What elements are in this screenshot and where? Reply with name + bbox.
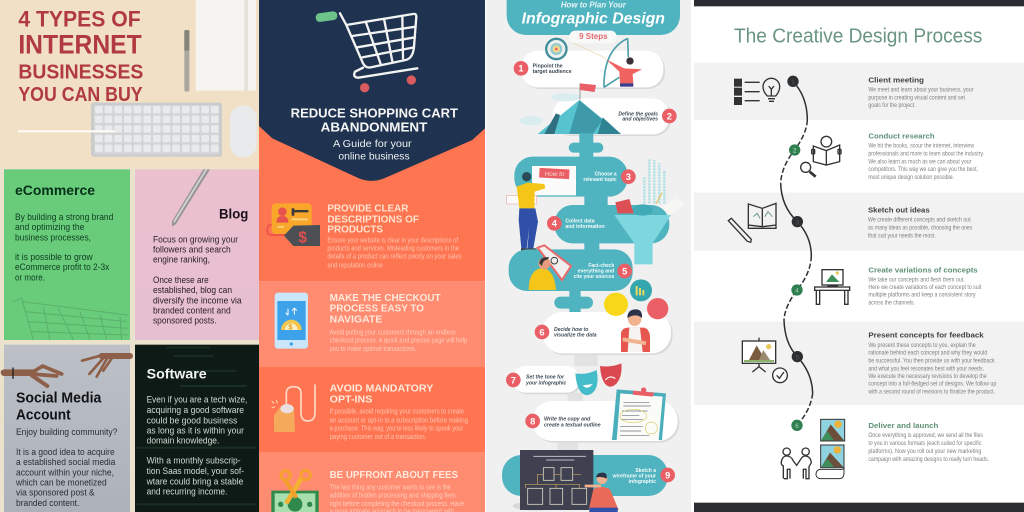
- card: Social Media Account: Account: [16, 406, 71, 423]
- header banner: How to Plan Your: [561, 0, 627, 9]
- step: checkout process: checkout process. A quick and precise page will help: [330, 336, 467, 345]
- card: Blog: sponsored posts.: [153, 316, 217, 326]
- card: Software: domain knowledge.: [147, 436, 219, 446]
- card: Blog: established, blog can: [153, 285, 232, 295]
- step 8: write the copy: Write the copy and: [544, 417, 591, 423]
- step 1: pinpoint the target audience: Pinpoint the: [533, 64, 563, 70]
- node 6: 6: [795, 423, 799, 430]
- node 1: 1: [791, 79, 795, 86]
- card: Blog: Blog: [219, 205, 248, 221]
- badge: 9 steps: 9 Steps: [579, 32, 608, 41]
- icon: phone checkout: [275, 293, 308, 349]
- step: avoid opt-ins: a purchase. This way, you're less likely to spook your: [330, 424, 464, 433]
- text: deliver and launch: Once everything is approved, we send all the files: [868, 433, 983, 439]
- card: Blog: diversify the income via: [153, 295, 242, 305]
- icon: open book and pencil: [728, 203, 776, 242]
- step 5: fact-check: 5: [622, 266, 627, 276]
- icon: theatre masks: [575, 363, 622, 395]
- title: 4 TYPES OF: [18, 7, 141, 32]
- card: Software: tion Saas model, your sof-: [147, 466, 244, 476]
- icon: man drawing: [585, 473, 619, 512]
- icon: man at whiteboard: [507, 172, 545, 251]
- icon: data funnel: [614, 158, 685, 264]
- card: Social Media Account: [4, 345, 130, 512]
- title: INTERNET: [18, 29, 142, 59]
- step 1: pinpoint the target audience: [514, 38, 665, 89]
- badge: 9 steps: [569, 31, 617, 43]
- subtitle: A Guide for your: [333, 139, 412, 150]
- text: present concepts: We execute the necessary revisions to develop the: [868, 374, 987, 380]
- step 8: write the copy: 8: [530, 416, 535, 426]
- title: The Creative Design Process: [734, 25, 982, 47]
- text: conduct research: competitors. This way we can give you the best,: [868, 167, 978, 173]
- text: conduct research: most unique design solution possible.: [868, 175, 954, 181]
- step: provide clear descriptions: PRODUCTS: [327, 225, 384, 236]
- icon: product card with price tag: $: [298, 229, 307, 246]
- card: Software: Software: [147, 366, 207, 382]
- step: upfront about fees: BE UPFRONT ABOUT FEES: [330, 470, 459, 481]
- text: present concepts: be successful. You then provide us with your feedback: [868, 358, 996, 364]
- text: present concepts: rationale behind each concept and why they would: [868, 351, 987, 357]
- card: Software: wtare could bring a stable: [146, 476, 243, 486]
- step: avoid opt-ins: [330, 384, 468, 441]
- node 5: 5: [795, 354, 799, 361]
- connector: teal blobs: [569, 133, 608, 258]
- node 4: [791, 284, 803, 296]
- card: eCommerce: eCommerce profit to 2-3x: [15, 262, 110, 272]
- card: Software: With a monthly subscrip-: [147, 456, 241, 466]
- step 4: collect data: and information: [565, 224, 605, 230]
- text: sketch out ideas: Sketch out ideas: [868, 206, 930, 215]
- step 3: choose a relevant topic: Choose a: [595, 172, 617, 178]
- card: Blog: Once these are: [153, 275, 209, 285]
- step: checkout process: you to make optimal transactions.: [330, 344, 416, 353]
- step: avoid opt-ins: If possible, avoid requiring your customers to create: [330, 407, 464, 416]
- icon: product card with price tag: [267, 203, 320, 246]
- text: sketch out ideas: that suit your needs the most.: [868, 233, 936, 239]
- text: deliver and launch: platforms). Now you roll out your new marketing: [868, 449, 981, 455]
- heading: reduce shopping cart abandonment: [291, 105, 458, 135]
- text: create variations: Create variations of concepts: [868, 265, 978, 274]
- step 9: sketch a wireframe: infographic: [629, 479, 656, 485]
- card: Social Media Account: which can be monetized: [15, 477, 107, 487]
- step: avoid opt-ins: an account or opt-in to a subscription before making: [330, 415, 468, 424]
- step 6: decide how to visualize: visualize the data: [554, 333, 597, 339]
- step: checkout process: Avoid putting your customers through an endless: [330, 327, 456, 336]
- step: avoid opt-ins: OPT-INS: [330, 395, 373, 406]
- card: Social Media Account: Social Media: [16, 390, 102, 407]
- text: create variations: across the channels.: [868, 301, 915, 307]
- icon: mouse and hand: [272, 384, 315, 432]
- text: present concepts: and what you feel resonates best with your needs.: [868, 366, 984, 372]
- timeline path: [781, 81, 813, 425]
- card: Software: acquiring a good software: [147, 405, 244, 415]
- step 2: define goals and objectives: [519, 83, 677, 136]
- node 3: 3: [795, 219, 799, 226]
- navy header shape: [259, 0, 485, 181]
- step 3: choose a relevant topic: relevant topic: [583, 177, 617, 183]
- text: sketch out ideas: We create different concepts and sketch out: [868, 218, 971, 224]
- card: Blog: branded content and: [153, 305, 231, 315]
- card: Social Media Account: a established social media: [16, 457, 115, 467]
- text: client meeting: [868, 76, 973, 109]
- step 5: fact-check: [509, 245, 633, 291]
- icon: monitor on desk: [815, 270, 850, 304]
- icon: thinking man: [604, 279, 668, 352]
- mouse: [230, 106, 257, 157]
- step 6: decide how to visualize: [535, 279, 673, 355]
- step: upfront about fees: [330, 470, 464, 512]
- text: present concepts: Present concepts for feedback: [868, 331, 984, 340]
- icon: clipboard: [612, 387, 666, 440]
- card: Blog: [135, 169, 259, 340]
- node 2: 2: [793, 148, 797, 155]
- node 5: [792, 351, 803, 362]
- card: Software: Even if you are a tech wize,: [147, 395, 247, 405]
- card: eCommerce: [4, 169, 130, 340]
- card: Blog: followers and search: [153, 245, 231, 255]
- card: eCommerce: it is possible to grow: [15, 252, 93, 262]
- icon: presentation board: [742, 338, 787, 383]
- card: eCommerce: or more.: [15, 272, 45, 282]
- step: provide clear descriptions: [327, 204, 462, 270]
- card: eCommerce: By building a strong brand: [15, 212, 113, 222]
- step: checkout process: MAKE THE CHECKOUT: [330, 293, 441, 304]
- step 9: sketch a wireframe: [502, 450, 675, 512]
- card: Software: as long as it is within your: [147, 426, 244, 436]
- heading: reduce shopping cart abandonment: ABANDONMENT: [321, 120, 427, 135]
- icon: archer: [573, 38, 642, 87]
- step 8: write the copy: create a textual outline: [544, 422, 601, 428]
- step 4: collect data: [547, 205, 669, 243]
- icon: reaching hands: [4, 355, 130, 386]
- step 3: choose a relevant topic: [514, 157, 636, 197]
- notebook: [196, 0, 256, 91]
- title: BUSINESSES: [18, 60, 143, 83]
- step 2: define goals and objectives: 2: [667, 111, 672, 121]
- text: conduct research: We also learn as much as we can about your: [868, 159, 971, 165]
- card: Blog: Focus on growing your: [153, 235, 238, 245]
- icon: shopping cart: [315, 11, 417, 92]
- icon: phone checkout: $: [288, 322, 292, 331]
- step 2: define goals and objectives: Define the goals: [618, 111, 658, 117]
- step 5: fact-check: Fact-check: [588, 263, 614, 269]
- step: avoid opt-ins: paying customer out of a transaction.: [330, 432, 426, 441]
- text: deliver and launch: to you in various formats (each suited for specific: [868, 441, 981, 447]
- step 7: set the tone: 7: [511, 375, 516, 385]
- icon: checklist and bulb: [735, 78, 780, 104]
- icon: target: [545, 38, 568, 60]
- icon: scissors and banknote: [271, 470, 319, 512]
- step 9: sketch a wireframe: Sketch a: [635, 468, 656, 474]
- title: YOU CAN BUY: [18, 83, 143, 106]
- card: Social Media Account: branded content.: [16, 498, 79, 508]
- heading: reduce shopping cart abandonment: REDUCE SHOPPING CART: [291, 105, 458, 120]
- text: client meeting: goals for the project.: [868, 103, 916, 109]
- node 6: [791, 420, 803, 431]
- text: create variations: Here we create variations of each concept to suit: [868, 285, 982, 291]
- panel: the creative design process: [694, 0, 1024, 512]
- text: client meeting: Client meeting: [868, 76, 924, 85]
- step: checkout process: NAVIGATE: [330, 314, 383, 325]
- text: deliver and launch: Deliver and launch: [868, 421, 939, 430]
- step 9: sketch a wireframe: 9: [665, 470, 670, 480]
- text: conduct research: [868, 131, 984, 181]
- step 3: choose a relevant topic: How to: [545, 171, 565, 178]
- step: provide clear descriptions: DESCRIPTIONS OF: [327, 214, 419, 225]
- step 8: write the copy: [525, 387, 679, 443]
- panel: 4 types of internet businesses: [0, 0, 260, 512]
- text: present concepts: We present these concepts to you, explain the: [868, 343, 976, 349]
- connector: teal blob lower: [554, 289, 593, 313]
- card: eCommerce: eCommerce: [15, 182, 95, 198]
- icon: person reading: [529, 245, 571, 290]
- card: Social Media Account: Enjoy building community?: [16, 427, 117, 437]
- text: conduct research: professionals and more to learn about the industry.: [868, 152, 984, 158]
- step: provide clear descriptions: details of a product can reflect poorly on your sales: [327, 252, 462, 261]
- icon: reader and magnifier: [801, 136, 841, 177]
- card: Social Media Account: via sponsored post &: [16, 488, 95, 498]
- icon: wireframe blackboard: [513, 450, 593, 511]
- connector: gray step links: [558, 353, 598, 456]
- step: upfront about fees: right before completing the checkout process. Have: [330, 499, 464, 508]
- card: eCommerce: and optimizing the: [15, 222, 84, 232]
- text: sketch out ideas: [868, 206, 972, 239]
- card: Software: [135, 345, 259, 512]
- step: provide clear descriptions: Ensure your website is clear in your descriptions of: [327, 235, 459, 244]
- step 7: set the tone: Set the tone for: [526, 375, 565, 381]
- text: conduct research: We hit the books, scour the internet, interview: [868, 144, 975, 150]
- text: create variations: We take our concepts and flesh them out.: [868, 277, 965, 283]
- text: present concepts: with a second round of revisions to finalize the product.: [867, 390, 995, 396]
- step: provide clear descriptions: PROVIDE CLEAR: [327, 204, 408, 215]
- step: checkout process: PROCESS EASY TO: [330, 304, 424, 315]
- panel: reduce shopping cart abandonment: [259, 0, 485, 512]
- step: upfront about fees: addition of hidden processing and shipping fees: [330, 491, 456, 500]
- header banner: Infographic Design: [522, 10, 665, 27]
- step: provide clear descriptions: and reputation online: [327, 261, 383, 270]
- text: deliver and launch: campaign with amazing designs to really turn heads.: [868, 457, 989, 463]
- node 3: [792, 216, 803, 227]
- step 5: fact-check: cite your sources: [574, 274, 614, 280]
- step 1: pinpoint the target audience: target audience: [533, 69, 572, 75]
- card: eCommerce: business processes,: [15, 233, 91, 243]
- text: sketch out ideas: as many ideas as possible, choosing the ones: [868, 226, 972, 232]
- step 7: set the tone: your infographic: [525, 380, 566, 386]
- title: [18, 7, 143, 106]
- text: client meeting: purpose in creating visual content and set: [868, 95, 965, 101]
- step 4: collect data: Collect data: [565, 219, 595, 225]
- step 6: decide how to visualize: 6: [539, 327, 545, 337]
- text: present concepts: [867, 331, 997, 396]
- node 2: [789, 144, 800, 156]
- text: create variations: multiple platforms and keep a consistent story: [868, 293, 976, 299]
- step: upfront about fees: The last thing any customer wants to see is the: [330, 482, 451, 491]
- step: provide clear descriptions: products and services. Misleading customers in the: [327, 244, 459, 253]
- node 4: 4: [795, 288, 799, 295]
- step 7: set the tone: [506, 363, 622, 395]
- step 2: define goals and objectives: and objectives: [622, 117, 658, 123]
- icon: faint shopping cart: [13, 298, 128, 340]
- icon: silver pen: [172, 169, 210, 227]
- card: Software: and recurring income.: [147, 487, 227, 497]
- card: Social Media Account: It is a good idea to acquire: [16, 447, 115, 457]
- step 5: fact-check: everything and: [578, 269, 614, 275]
- subtitle: [333, 139, 412, 163]
- subtitle: online business: [338, 152, 410, 163]
- icon: mountain with flag: [519, 83, 621, 134]
- text: present concepts: concept into a full-fledged set of designs. We follow up: [868, 382, 997, 388]
- card: Social Media Account: account within your niche,: [16, 467, 114, 477]
- pen: [184, 30, 189, 92]
- step 3: choose a relevant topic: 3: [626, 172, 631, 182]
- text: client meeting: We meet and learn about your business, your: [868, 87, 973, 93]
- step: checkout process: [330, 293, 467, 353]
- step 1: pinpoint the target audience: 1: [518, 64, 524, 74]
- node 1: [787, 76, 799, 87]
- step 6: decide how to visualize: Decide how to: [554, 327, 589, 333]
- icon: handshake and artwork: [781, 419, 845, 479]
- card: Blog: engine ranking,: [153, 255, 210, 265]
- step: avoid opt-ins: AVOID MANDATORY: [330, 384, 434, 395]
- text: create variations: [868, 265, 982, 307]
- card: Software: could be good business: [147, 415, 238, 425]
- keyboard: [91, 103, 222, 157]
- text: conduct research: Conduct research: [868, 131, 935, 140]
- panel: how to plan your infographic design: [486, 0, 691, 512]
- step 9: sketch a wireframe: wireframe of your: [612, 473, 656, 479]
- header banner: [507, 0, 680, 35]
- text: deliver and launch: [868, 421, 989, 463]
- step 4: collect data: 4: [552, 219, 558, 229]
